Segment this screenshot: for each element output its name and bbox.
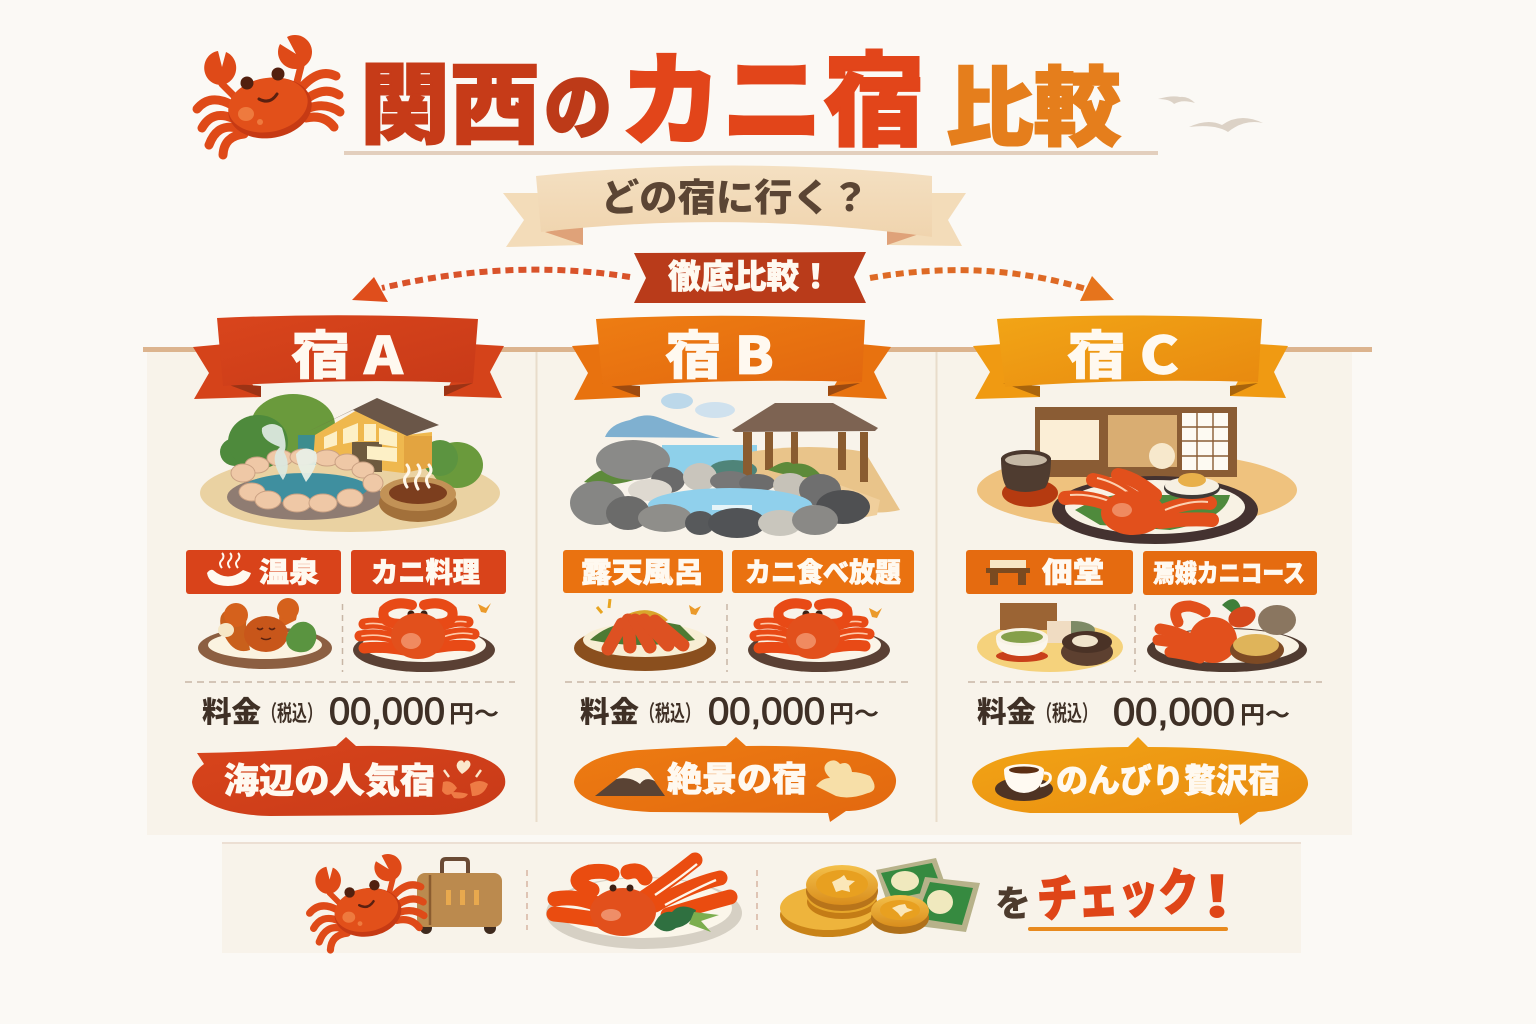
callout: 絶景の宿 bbox=[574, 737, 896, 822]
icon: seagulls bbox=[1158, 96, 1263, 132]
tag: 温泉: 温泉 bbox=[259, 551, 319, 591]
dashed divider bbox=[968, 681, 1322, 683]
ribbon: 宿B bbox=[572, 314, 891, 400]
dashed separator bbox=[756, 870, 758, 930]
icon: crab dish bbox=[198, 598, 332, 669]
price bbox=[977, 689, 1290, 734]
tag: カニ料理 bbox=[351, 550, 506, 594]
dashed separator bbox=[342, 604, 344, 672]
ribbon: 宿C: 宿 C bbox=[1067, 314, 1179, 389]
icon: coins and banknotes bbox=[780, 858, 980, 937]
text: をチェック！: を bbox=[995, 875, 1031, 927]
dashed divider bbox=[565, 681, 912, 683]
callout: のんびり贅沢宿: のんびり贅沢宿 bbox=[1056, 754, 1280, 802]
price: （税込） bbox=[1037, 696, 1097, 728]
tag: 露天風呂: 露天風呂 bbox=[581, 551, 704, 591]
title: 関西 bbox=[360, 35, 540, 162]
price: 料金 bbox=[977, 689, 1036, 731]
tag: カニ食べ放題: カニ食べ放題 bbox=[745, 551, 901, 590]
price: 00,000 bbox=[1113, 691, 1235, 734]
tag: 佃堂 bbox=[966, 550, 1133, 594]
illustration: 露天風呂 scene bbox=[570, 393, 900, 538]
badge: 徹底比較！: 徹底比較！ bbox=[668, 250, 832, 298]
panel: comparison board bbox=[143, 347, 1372, 835]
icon: crab on plate bbox=[353, 603, 495, 672]
tag: 焉娥カニコース: 焉娥カニコース bbox=[1153, 554, 1305, 590]
callout: 海辺の人気宿: 海辺の人気宿 bbox=[224, 753, 435, 804]
banner: どの宿に行く？ bbox=[503, 166, 966, 247]
tag: 温泉 bbox=[186, 550, 341, 594]
icon: title crab bbox=[197, 35, 340, 155]
title: カニ宿 bbox=[620, 20, 925, 167]
title: の bbox=[544, 49, 612, 154]
dashed separator bbox=[726, 604, 728, 672]
title: 比較 bbox=[946, 38, 1121, 163]
illustration: 温泉 scene bbox=[200, 394, 500, 532]
price: 00,000 bbox=[329, 691, 445, 733]
dashed divider bbox=[185, 681, 515, 683]
panel: 宿A bbox=[185, 314, 515, 816]
badge: 徹底比較！ bbox=[634, 250, 866, 303]
icon: crab leg platter bbox=[574, 599, 716, 671]
price: 料金 bbox=[580, 689, 639, 731]
ribbon: 宿A: 宿 A bbox=[291, 314, 404, 389]
arrow: to 宿A bbox=[352, 270, 630, 302]
title underline bbox=[344, 151, 1158, 155]
price: 00,000 bbox=[708, 691, 825, 733]
dashed separator bbox=[526, 870, 528, 930]
price: 円～ bbox=[449, 694, 499, 729]
dashed separator bbox=[1134, 604, 1136, 672]
title bbox=[360, 20, 1121, 167]
ribbon: 宿B: 宿 B bbox=[665, 314, 774, 389]
icon: crab on plate bbox=[748, 603, 890, 672]
icon: smiling crab bbox=[310, 854, 424, 950]
price: 円～ bbox=[1240, 695, 1290, 730]
price bbox=[580, 689, 879, 733]
banner: どの宿に行く？: どの宿に行く？ bbox=[601, 167, 869, 222]
tag: カニ料理: カニ料理 bbox=[371, 551, 480, 591]
ribbon: 宿C bbox=[973, 314, 1288, 399]
tag: 露天風呂 bbox=[563, 550, 723, 593]
panel: 宿B bbox=[563, 314, 914, 822]
callout: のんびり贅沢宿 bbox=[972, 737, 1308, 825]
icon: crab course plate bbox=[1147, 599, 1307, 672]
text: をチェック！: チェック bbox=[1035, 852, 1201, 932]
price: （税込） bbox=[640, 696, 700, 728]
panel: 宿C bbox=[966, 314, 1322, 825]
arrow: to 宿C bbox=[870, 270, 1114, 301]
tag: 佃堂: 佃堂 bbox=[1042, 551, 1104, 591]
illustration: 個室 scene bbox=[977, 407, 1297, 544]
price bbox=[202, 689, 499, 733]
price: 円～ bbox=[829, 694, 879, 729]
icon: set meal bbox=[977, 603, 1123, 672]
callout: 海辺の人気宿 bbox=[192, 737, 505, 816]
callout: 絶景の宿: 絶景の宿 bbox=[667, 752, 807, 801]
icon: crab platter bbox=[546, 860, 742, 949]
icon: suitcase bbox=[417, 859, 502, 934]
price: 料金 bbox=[202, 689, 261, 731]
price: （税込） bbox=[262, 696, 322, 728]
panel: bottom strip bbox=[222, 842, 1301, 953]
ribbon: 宿A bbox=[193, 314, 504, 399]
text: をチェック！: ! bbox=[1203, 853, 1231, 934]
